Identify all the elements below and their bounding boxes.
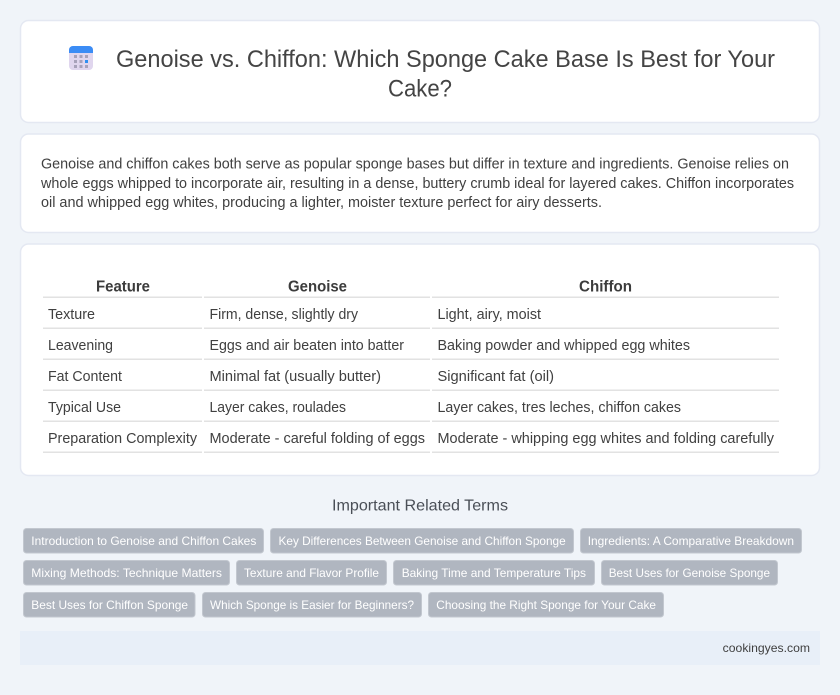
panel: introduction: [20, 134, 820, 232]
tag: [24, 592, 195, 617]
tag: Mixing Methods: Technique Matters: [31, 566, 222, 580]
tag: [236, 560, 386, 585]
text block: introduction: Genoise and chiffon cakes both serve as popular sponge bases but differ in texture and ingredients. Genoise relies on: [41, 156, 789, 172]
table row: fat content: Fat Content: [48, 369, 122, 385]
tag: Best Uses for Genoise Sponge: [609, 566, 770, 580]
tag: Key Differences Between Genoise and Chiffon Sponge: [278, 534, 566, 548]
footer: [20, 631, 820, 665]
text block: introduction: whole eggs whipped to incorporate air, resulting in a dense, buttery crumb ideal for layered cakes. Chiffon incorporates: [40, 176, 794, 192]
tag: [394, 560, 594, 585]
tag: Best Uses for Chiffon Sponge: [31, 598, 188, 612]
tag: [602, 560, 778, 585]
tag: [24, 560, 230, 585]
table row: fat content: Minimal fat (usually butter): [210, 369, 381, 385]
panel: comparison table: [20, 244, 820, 476]
table header: Feature: [96, 278, 150, 296]
table row: leavening: Leavening: [48, 338, 113, 354]
table row: texture: Texture: [48, 307, 95, 323]
table row: fat content: Significant fat (oil): [438, 369, 554, 385]
footer: cookingyes.com: [723, 641, 810, 655]
table row: texture: Firm, dense, slightly dry: [210, 307, 359, 323]
tag: Choosing the Right Sponge for Your Cake: [436, 598, 656, 612]
table row: texture: [43, 307, 779, 329]
title: [116, 46, 775, 102]
table row: preparation complexity: Moderate - careful folding of eggs: [210, 431, 425, 447]
table row: typical use: [43, 400, 779, 422]
heading: related terms: Important Related Terms: [332, 498, 508, 514]
tag: Introduction to Genoise and Chiffon Cakes: [31, 534, 256, 548]
icon: calendar: [69, 46, 93, 70]
panel: header: [20, 20, 820, 122]
tag: Which Sponge is Easier for Beginners?: [210, 598, 414, 612]
tag: [202, 592, 422, 617]
text block: introduction: [40, 156, 794, 211]
table row: preparation complexity: [43, 431, 779, 453]
table row: leavening: Eggs and air beaten into batter: [210, 338, 404, 354]
tag: Ingredients: A Comparative Breakdown: [588, 534, 794, 548]
text block: introduction: oil and whipped egg whites, producing a lighter, moister texture perfect for airy desserts.: [41, 195, 602, 211]
tag: [428, 592, 664, 617]
tag: [270, 528, 574, 553]
table row: leavening: Baking powder and whipped egg whites: [438, 338, 690, 354]
table row: texture: Light, airy, moist: [438, 307, 541, 323]
table row: preparation complexity: Preparation Complexity: [48, 431, 198, 447]
title: Genoise vs. Chiffon: Which Sponge Cake Base Is Best for Your: [116, 46, 775, 73]
table row: leavening: [43, 338, 779, 360]
table header: Genoise: [288, 278, 347, 296]
table row: typical use: Layer cakes, roulades: [210, 400, 346, 416]
tag: Baking Time and Temperature Tips: [402, 566, 586, 580]
table header: Chiffon: [579, 278, 632, 296]
table row: preparation complexity: Moderate - whipping egg whites and folding carefully: [438, 431, 775, 447]
table row: fat content: [43, 369, 779, 391]
panel: related term tags: [24, 528, 802, 617]
tag: [24, 528, 264, 553]
title: Cake?: [388, 76, 452, 102]
table header: [43, 278, 779, 298]
table row: typical use: Layer cakes, tres leches, chiffon cakes: [438, 400, 681, 416]
table row: typical use: Typical Use: [48, 400, 121, 416]
tag: Texture and Flavor Profile: [244, 566, 379, 580]
tag: [580, 528, 802, 553]
